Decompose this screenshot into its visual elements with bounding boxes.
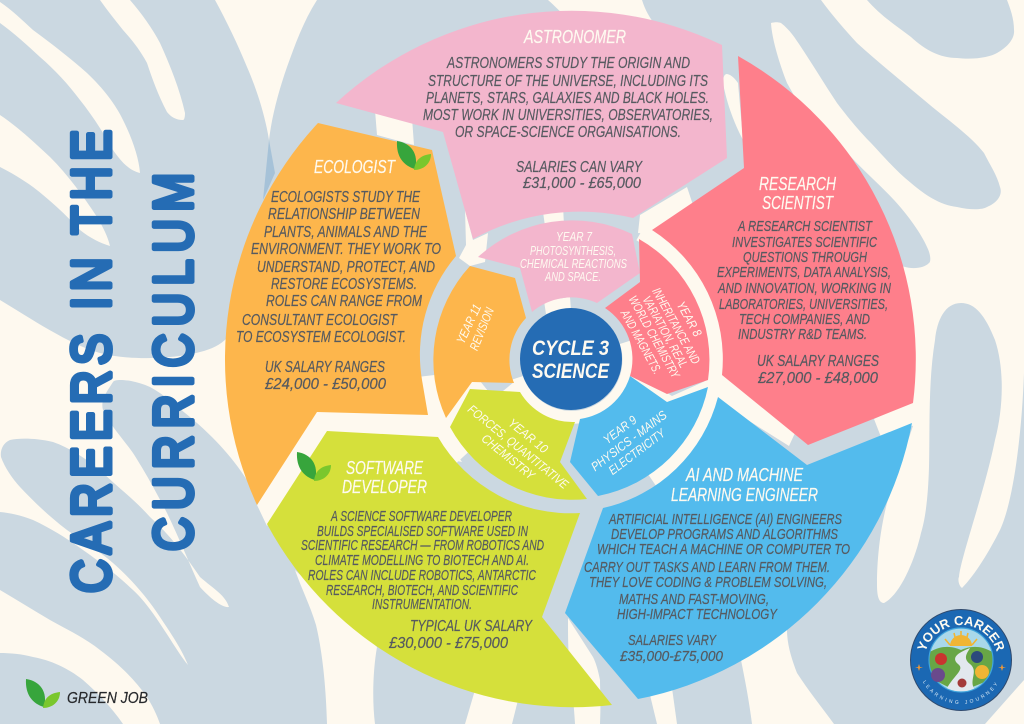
panel: ecologist: UNDERSTAND, PROTECT, AND [257, 259, 435, 276]
panel: year 9 [570, 376, 708, 496]
panel: year 9: YEAR 9 [601, 413, 639, 447]
panel: astronomer: SALARIES CAN VARY [516, 159, 643, 176]
center circle: cycle 3 science: CYCLE 3 [532, 337, 609, 360]
panel: software developer [267, 431, 612, 707]
panel: year 9: ELECTRICITY [606, 425, 669, 478]
panel: software developer: £30,000 - £75,000 [388, 635, 508, 652]
panel: research scientist: UK SALARY RANGES [757, 353, 880, 370]
panel: ai and machine learning engineer [565, 397, 912, 699]
panel: software developer: BUILDS SPECIALISED SOFTWARE USED IN [317, 524, 528, 540]
panel: year 7: PHOTOSYNTHESIS, [530, 244, 616, 258]
panel: ai and machine learning engineer: HIGH-IMPACT TECHNOLOGY [617, 607, 778, 623]
panel: ai and machine learning engineer: AI AND MACHINE [685, 465, 804, 485]
panel: research scientist: RESEARCH [759, 174, 837, 194]
logo: your career learning journey: LEARNING JOURNEY [923, 680, 997, 704]
panel: year 11: REVISION [467, 305, 497, 352]
panel: year 9: PHYSICS - MAINS [588, 408, 670, 474]
title: careers in the curriculum [60, 130, 204, 593]
panel: year 8: YEAR 8 [674, 299, 704, 339]
panel: ecologist: ECOLOGISTS STUDY THE [271, 189, 421, 206]
panel: research scientist: TECH COMPANIES, AND [739, 312, 870, 328]
panel: year 8: INHERITANCE AND [649, 285, 703, 367]
panel: ecologist: £24,000 - £50,000 [264, 376, 386, 393]
center circle: cycle 3 science [520, 308, 622, 410]
legend: green job: GREEN JOB [67, 690, 148, 707]
panel: research scientist: £27,000 - £48,000 [757, 370, 878, 387]
panel: software developer: A SCIENCE SOFTWARE DEVELOPER [330, 509, 512, 525]
panel: software developer: RESEARCH, BIOTECH, AND SCIENTIFIC [326, 583, 518, 599]
panel: ai and machine learning engineer: SALARIES VARY [628, 633, 717, 649]
panel: astronomer: ASTRONOMERS STUDY THE ORIGIN AND [446, 55, 690, 72]
panel: research scientist: LABORATORIES, UNIVERSITIES, [719, 297, 888, 313]
icon: ecologist green leaf [397, 141, 431, 170]
panel: software developer: CLIMATE MODELLING TO BIOTECH AND AI. [315, 553, 529, 569]
panel: ecologist: CONSULTANT ECOLOGIST [242, 312, 398, 329]
panel: software developer: INSTRUMENTATION. [372, 597, 472, 613]
legend: green job [26, 679, 148, 708]
panel: software developer: ROLES CAN INCLUDE ROBOTICS, ANTARCTIC [308, 568, 536, 584]
panel: software developer: TYPICAL UK SALARY [410, 618, 533, 635]
panel: ai and machine learning engineer: LEARNING ENGINEER [671, 485, 818, 505]
panel: astronomer: OR SPACE-SCIENCE ORGANISATIONS. [455, 124, 681, 141]
panel: year 8: WORLD CHEMISTRY [626, 293, 683, 382]
panel: research scientist: INVESTIGATES SCIENTIFIC [732, 235, 877, 251]
panel: software developer: SCIENTIFIC RESEARCH — FROM ROBOTICS AND [301, 538, 544, 554]
panel: research scientist: QUESTIONS THROUGH [743, 250, 867, 266]
panel: research scientist: EXPERIMENTS, DATA ANALYSIS, [717, 265, 891, 281]
icon: software developer green leaf [297, 452, 331, 481]
panel: ecologist: UK SALARY RANGES [265, 359, 386, 376]
logo: your career learning journey [910, 609, 1012, 711]
panel: astronomer: PLANETS, STARS, GALAXIES AND BLACK HOLES. [426, 90, 709, 107]
panel: year 8: AND MAGNETS. [617, 307, 664, 376]
title: careers in the curriculum: CURRICULUM [142, 173, 204, 551]
panel: year 11 [433, 266, 526, 418]
panel: research scientist [652, 56, 916, 445]
panel: ai and machine learning engineer: MATHS AND FAST-MOVING, [619, 592, 769, 608]
panel: ecologist [225, 123, 456, 505]
panel: year 10: FORCES, QUANTITATIVE [465, 402, 571, 492]
panel: ai and machine learning engineer: £35,000-£75,000 [619, 649, 723, 665]
panel: research scientist: AND INNOVATION, WORKING IN [717, 281, 891, 297]
panel: astronomer: MOST WORK IN UNIVERSITIES, OBSERVATORIES, [423, 107, 713, 124]
panel: ai and machine learning engineer: WHICH TEACH A MACHINE OR COMPUTER TO [597, 542, 850, 558]
panel: year 7: AND SPACE. [544, 270, 601, 284]
panel: software developer: DEVELOPER [342, 477, 427, 497]
panel: astronomer: STRUCTURE OF THE UNIVERSE, INCLUDING ITS [428, 73, 709, 90]
panel: year 7 [478, 220, 640, 312]
panel: ai and machine learning engineer: DEVELOP PROGRAMS AND ALGORITHMS [611, 527, 838, 543]
panel: ecologist: TO ECOSYSTEM ECOLOGIST. [236, 329, 406, 346]
center circle: cycle 3 science: SCIENCE [532, 360, 610, 383]
panel: ecologist: ECOLOGIST [314, 157, 397, 177]
panel: astronomer [336, 11, 727, 239]
panel: year 10: YEAR 10 [505, 416, 551, 456]
panel: year 8: VARIATION, REAL [639, 294, 691, 370]
panel: ai and machine learning engineer: ARTIFICIAL INTELLIGENCE (AI) ENGINEERS [608, 512, 842, 528]
panel: ecologist: ROLES CAN RANGE FROM [266, 293, 422, 310]
panel: ai and machine learning engineer: THEY LOVE CODING & PROBLEM SOLVING, [589, 575, 827, 591]
panel: research scientist: A RESEARCH SCIENTIST [737, 219, 873, 235]
panel: ecologist: RESTORE ECOSYSTEMS. [271, 276, 417, 293]
logo: your career learning journey: YOUR CAREER [917, 616, 1004, 652]
panel: research scientist: SCIENTIST [762, 193, 835, 213]
panel: ecologist: ENVIRONMENT. THEY WORK TO [251, 241, 441, 258]
title: careers in the curriculum: CAREERS IN THE [60, 130, 122, 593]
panel: year 7: CHEMICAL REACTIONS [520, 257, 628, 271]
panel: research scientist: INDUSTRY R&D TEAMS. [738, 327, 867, 343]
panel: ecologist: RELATIONSHIP BETWEEN [268, 206, 421, 223]
panel: ai and machine learning engineer: CARRY OUT TASKS AND LEARN FROM THEM. [584, 560, 830, 576]
panel: astronomer: ASTRONOMER [523, 27, 626, 47]
panel: year 10: CHEMISTRY [479, 431, 538, 483]
panel: software developer: SOFTWARE [346, 458, 424, 478]
panel: year 11: YEAR 11 [454, 302, 484, 346]
panel: ecologist: PLANTS, ANIMALS AND THE [264, 224, 428, 241]
panel: year 7: YEAR 7 [556, 230, 593, 244]
panel: astronomer: £31,000 - £65,000 [522, 175, 641, 192]
panel: year 8 [605, 239, 709, 394]
